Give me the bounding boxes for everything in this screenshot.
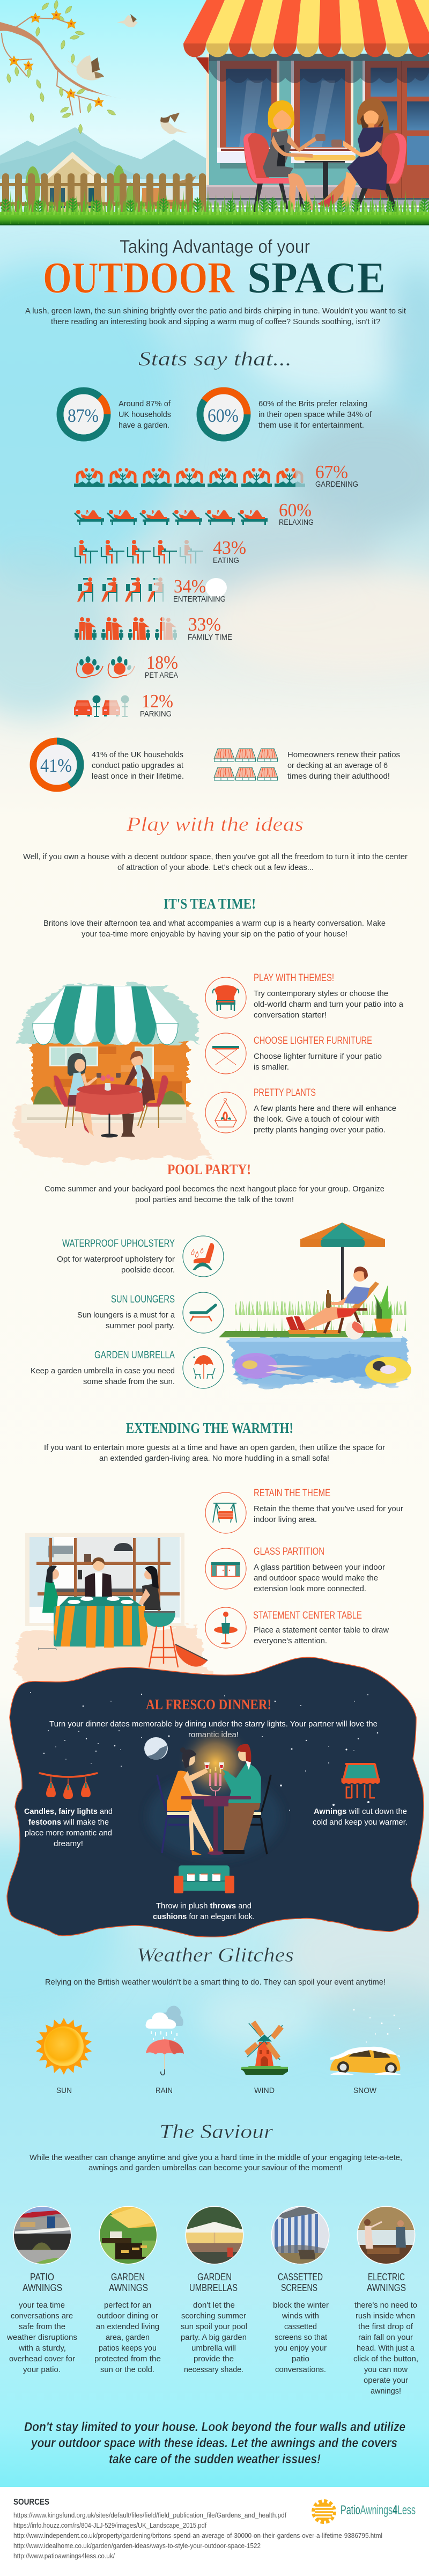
donut: 41 percent (33, 741, 80, 788)
heading: Weather Glitches: Weather Glitches (137, 1944, 294, 1966)
text: pool party intro: Come summer and your backyard pool becomes the next hangout place for your group. Organize (45, 1185, 384, 1194)
icon: rain cloud and umbrella (146, 2006, 184, 2075)
text: al fresco intro (49, 1720, 378, 1739)
text: patio awnings (6, 2272, 77, 2374)
icon: sun lounger (183, 1292, 224, 1333)
text: tea time intro: your tea-time more enjoyable by having your sip on the patio of your house! (82, 930, 347, 939)
pictogram row: gardening: GARDENING (315, 480, 358, 489)
brushed ground (13, 1626, 212, 1685)
icon: swing seat (205, 1492, 246, 1533)
text: garden umbrellas: don't let the (193, 2301, 235, 2310)
tip: waterproof upholstery (57, 1236, 224, 1277)
donut: 87 percent: 87% (68, 405, 99, 426)
text: candles and fairy lights: Candles, fairy lights and (24, 1807, 113, 1816)
text: garden umbrellas: party. A big garden (181, 2333, 247, 2342)
potted plant and ball (345, 1285, 393, 1340)
text: electric awnings: click of the button, (353, 2355, 418, 2363)
pictogram row: pet area: PET AREA (145, 671, 178, 680)
text: candles and fairy lights: festoons will make the (28, 1818, 109, 1827)
text: pretty plants: the look. Give a touch of colour with (254, 1115, 380, 1124)
table and candles (181, 1762, 251, 1855)
text: themes: PLAY WITH THEMES! (254, 972, 334, 984)
text: extending the warmth intro: an extended garden-living area. No more huddling in a small sofa! (99, 1454, 329, 1463)
text: garden umbrella (31, 1350, 175, 1386)
weather labels: SUN (56, 2087, 72, 2095)
heading: The Saviour: The Saviour (159, 2121, 273, 2143)
text: throws and cushions: Throw in plush throws and (156, 1902, 252, 1911)
text: garden umbrellas (181, 2272, 247, 2374)
text: garden awnings: sun or the cold. (100, 2366, 154, 2374)
text: decking: Homeowners renew their patios (287, 750, 400, 759)
stars (30, 1692, 378, 1811)
room backdrop (25, 1533, 184, 1626)
text: patio awnings: safe from the (19, 2323, 65, 2331)
text: garden umbrella: some shade from the sun. (83, 1378, 175, 1386)
moon (144, 1737, 168, 1760)
text: cassetted screens (273, 2272, 329, 2374)
text: garden umbrellas: GARDEN (197, 2272, 232, 2282)
man on sun lounger (286, 1267, 379, 1334)
text: patio awnings: weather disruptions (6, 2333, 77, 2342)
text: themes (254, 972, 404, 1020)
weather labels: WIND (254, 2087, 275, 2095)
text: patio awnings: conversations are (11, 2312, 73, 2321)
sources list: http://www.patioawnings4less.co.uk/ (13, 2552, 115, 2560)
pictogram row: family time: FAMILY TIME (188, 633, 232, 642)
umbrella (300, 1223, 385, 1302)
text: garden umbrellas: sun spoil your pool (181, 2323, 247, 2331)
text: garden umbrella: Keep a garden umbrella in case you need (31, 1367, 175, 1375)
heading: It's tea time: IT'S TEA TIME! (164, 896, 256, 912)
photo: yellow garden awning (99, 2206, 158, 2265)
text: statement center table: STATEMENT CENTER TABLE (253, 1610, 362, 1621)
icon: center table with flower (205, 1607, 246, 1648)
text: 41 percent (92, 750, 184, 781)
text: 60 percent: them use it for entertainment. (258, 421, 364, 430)
text: cassetted screens: winds with (282, 2312, 319, 2321)
pavement (206, 185, 429, 209)
panel background (7, 1657, 424, 1937)
text: cassetted screens: you enjoy your (275, 2344, 327, 2353)
text: throws and cushions (153, 1902, 255, 1921)
text: electric awnings: awnings! (371, 2387, 401, 2396)
text: waterproof: Opt for waterproof upholstery for (57, 1255, 175, 1264)
text: play with the ideas intro: Well, if you own a house with a decent outdoor space, then you've got all the freedom to turn it into the center (23, 853, 408, 861)
woman with blonde hair (243, 100, 316, 212)
striped dining table (39, 1597, 148, 1650)
heading: Pool party: POOL PARTY! (167, 1161, 251, 1177)
tip: sun loungers (77, 1292, 224, 1333)
text: pretty plants (254, 1087, 396, 1135)
sources heading: SOURCES (13, 2498, 49, 2507)
sources list (13, 2512, 382, 2560)
column: electric awnings (353, 2206, 418, 2396)
text: 87 percent (119, 399, 171, 430)
pictogram row: pet area (77, 652, 178, 680)
text: patio awnings: overhead cover for (9, 2355, 75, 2363)
text: cassetted screens: conversations. (275, 2366, 326, 2374)
text: saviour intro: awnings and garden umbrellas can become your saviour of the moment! (88, 2164, 343, 2172)
awning shadow (209, 54, 429, 83)
pictogram row: relaxing (75, 500, 314, 527)
barbecue grill (144, 1611, 208, 1667)
text: themes: conversation starter! (254, 1011, 327, 1020)
text: statement center table: everyone's attention. (254, 1637, 327, 1645)
text: sun loungers (77, 1294, 175, 1330)
text: electric awnings: the first drop of (358, 2323, 413, 2331)
text: extending the warmth intro: If you want to entertain more guests at a time and have an open garden, then utilize the space for (44, 1444, 385, 1452)
pictogram row: entertaining: 34% (174, 576, 206, 597)
text: waterproof (57, 1238, 175, 1275)
text: tea time intro: Britons love their afternoon tea and what accompanies a warm cup is a hearty conversation. Make (43, 919, 386, 928)
sources list: https://info.houzz.com/rs/804-JLJ-529/images/UK_Landscape_2015.pdf (13, 2522, 206, 2529)
text: electric awnings: there's no need to (354, 2301, 417, 2310)
shop wall (206, 54, 429, 185)
text: cassetted screens: cassetted (284, 2323, 317, 2331)
text: 60 percent: in their open space while 34% of (258, 410, 372, 419)
text: saviour intro: While the weather can change anytime and give you a hard time in the middle of your engaging tete-a-tete, (29, 2154, 402, 2162)
cafe wall (21, 1045, 186, 1123)
pictogram row: family time (75, 614, 232, 642)
man (222, 1744, 271, 1854)
photo: people under electric awning (357, 2206, 416, 2266)
text: cassetted screens: screens so that (275, 2333, 327, 2342)
text: 87 percent: UK households (119, 410, 171, 419)
pictogram row: gardening (74, 462, 358, 489)
donut: 60 percent: 60% (208, 405, 239, 426)
text: garden awnings: GARDEN (111, 2272, 145, 2282)
text: garden awnings: AWNINGS (109, 2282, 148, 2293)
intro text: A lush, green lawn, the sun shining brightly over the patio and birds chirping in tune. Wouldn't you want to sit (25, 307, 406, 316)
text: cassetted screens: CASSETTED (278, 2272, 323, 2282)
pictogram row: eating: EATING (213, 557, 239, 565)
text: lighter furniture: CHOOSE LIGHTER FURNITURE (254, 1035, 372, 1046)
icon: chair in circle (205, 977, 246, 1018)
text: electric awnings: AWNINGS (367, 2282, 406, 2293)
footer panel (0, 2487, 429, 2576)
text: glass partition: A glass partition between your indoor (254, 1563, 385, 1572)
cafe table (294, 134, 356, 200)
pictogram row: family time: 33% (188, 614, 221, 635)
pictogram row: pet area: 18% (146, 652, 178, 673)
weather labels: SNOW (353, 2087, 376, 2095)
closing statement (24, 2420, 405, 2467)
heading: Stats say that: Stats say that... (138, 348, 292, 370)
text: extending the warmth intro (44, 1444, 385, 1463)
heading: Taking Advantage of your: Taking Advantage of your (120, 237, 310, 257)
text: garden umbrellas: umbrella will (191, 2344, 236, 2353)
sources list: https://www.kingsfund.org.uk/sites/default/files/field/field_publication_file/Gardens_and_health.pdf (13, 2512, 286, 2519)
birds (66, 14, 188, 134)
icon: folding table in circle (205, 1033, 246, 1074)
title: Outdoor Space (43, 253, 386, 302)
icon: festoon lights (40, 1773, 97, 1799)
text: garden umbrellas: scorching summer (181, 2312, 246, 2321)
woman in black (138, 1566, 161, 1610)
title: Outdoor Space: SPACE (247, 253, 386, 302)
text: 41 percent: 41% of the UK households (92, 750, 183, 759)
text: pretty plants: pretty plants hanging over your patio. (254, 1126, 386, 1135)
icon: glass doors (205, 1548, 246, 1589)
text: 87 percent: Around 87% of (119, 399, 171, 408)
tip: retain the theme (205, 1488, 403, 1533)
icon: awning (342, 1764, 379, 1798)
intro text: there reading an interesting book and sipping a warm mug of coffee? Sounds soothing, isn't it? (51, 318, 380, 326)
icon: sofa with cushions (174, 1865, 234, 1893)
tip: pretty plants (205, 1087, 396, 1135)
text: retain the theme: RETAIN THE THEME (254, 1488, 330, 1499)
pictogram row: entertaining: ENTERTAINING (173, 595, 226, 604)
text: glass partition: GLASS PARTITION (254, 1546, 324, 1557)
pictogram row: relaxing: RELAXING (279, 518, 314, 527)
text: electric awnings: you can now (364, 2366, 408, 2374)
icon: windmill (241, 2021, 288, 2075)
text: garden awnings: area, garden (106, 2333, 150, 2342)
tip: glass partition (205, 1546, 385, 1593)
sources list: http://www.independent.co.uk/property/gardening/britons-spend-an-average-of-30000-on-their-gardens-over-a-lifetime-9386795.html (13, 2532, 382, 2540)
text: garden awnings: perfect for an (104, 2301, 151, 2310)
pictogram row: parking (74, 691, 173, 719)
text: 87 percent: have a garden. (119, 421, 169, 430)
tree branch with flowers (0, 0, 121, 134)
text: candles and fairy lights (24, 1807, 113, 1848)
photo: striped cassette screen (271, 2206, 330, 2265)
weather labels: RAIN (156, 2087, 173, 2095)
text: themes: old-world charm and turn your patio into a (254, 1000, 404, 1009)
logo: Patio Awnings 4 Less (314, 2501, 416, 2522)
text: electric awnings (353, 2272, 418, 2396)
woman, man and table (54, 1051, 168, 1138)
pictogram row: eating (75, 537, 246, 565)
text: electric awnings: rain fall on your (358, 2333, 413, 2342)
heading: Extending the warmth: EXTENDING THE WARMTH! (126, 1420, 293, 1436)
tip: statement center table (205, 1607, 389, 1648)
wooden frames (36, 1538, 180, 1613)
text: pool party intro: pool parties and become the talk of the town! (135, 1196, 294, 1204)
text: glass partition: and outdoor space would make the (254, 1574, 378, 1583)
woman (157, 1747, 214, 1855)
column: garden awnings (94, 2206, 161, 2374)
text: retain the theme: indoor living area. (254, 1516, 317, 1524)
icon: car in snow (330, 2009, 401, 2075)
striped awning (183, 0, 429, 74)
text: 41 percent: conduct patio upgrades at (92, 761, 184, 770)
text: sun loungers: Sun loungers is a must for a (77, 1311, 175, 1320)
title: Outdoor Space: OUTDOOR (43, 253, 235, 302)
text: cassetted screens: patio (292, 2355, 309, 2363)
donut: 41 percent: 41% (40, 755, 72, 776)
heading: Al fresco dinner: AL FRESCO DINNER! (146, 1696, 271, 1713)
text: electric awnings: ELECTRIC (368, 2272, 405, 2282)
text: al fresco intro: Turn your dinner dates memorable by dining under the starry lights. Your partner will love the (49, 1720, 378, 1729)
text: waterproof: poolside decor. (121, 1266, 175, 1275)
closing statement: take care of the sudden weather issues! (109, 2452, 321, 2467)
icon: decking planks (214, 749, 278, 780)
text: garden umbrellas: UMBRELLAS (189, 2282, 238, 2293)
pictogram row: entertaining (77, 576, 226, 604)
photo: large garden umbrella (185, 2206, 244, 2265)
pool water (230, 1338, 410, 1390)
text: saviour intro (29, 2154, 402, 2172)
text: play with the ideas intro: of attraction of your abode. Let's check out a few ideas... (117, 863, 314, 872)
text: 60 percent (258, 399, 372, 430)
text: awnings: Awnings will cut down the (314, 1807, 407, 1816)
hero illustration: patio scene (0, 0, 429, 225)
tip: choose lighter furniture (205, 1033, 382, 1074)
column: cassetted screens (271, 2206, 330, 2374)
donut: 87 percent (50, 381, 117, 448)
heading: Play with the ideas: Play with the ideas (126, 814, 304, 836)
pictogram row: relaxing: 60% (279, 500, 312, 521)
icon: chair with water drops (183, 1236, 224, 1277)
text: patio awnings: PATIO (30, 2272, 54, 2282)
text: garden umbrellas: necessary shade. (184, 2366, 243, 2374)
text: cassetted screens: block the winter (273, 2301, 329, 2310)
text: patio awnings: your patio. (23, 2366, 61, 2374)
text: tea time intro (43, 919, 386, 939)
tip: garden umbrella (31, 1348, 224, 1388)
text: awnings: cold and keep you warmer. (313, 1818, 408, 1827)
text: electric awnings: head. With just a (357, 2344, 415, 2353)
text: 60 percent: 60% of the Brits prefer relaxing (258, 399, 367, 408)
man standing (85, 1557, 112, 1598)
text: glass partition (254, 1546, 385, 1593)
text: statement center table (253, 1610, 389, 1645)
distant houses and trees (25, 152, 196, 214)
grass bank (219, 1301, 406, 1337)
text: play with the ideas intro (23, 853, 408, 872)
pictogram row: parking: 12% (142, 691, 173, 712)
illustration: man relaxing by the pool (219, 1223, 413, 1401)
text: pretty plants: A few plants here and there will enhance (254, 1104, 396, 1113)
icon: sun (35, 2018, 92, 2075)
text: themes: Try contemporary styles or choose the (254, 990, 388, 998)
teal and white awning (33, 986, 178, 1045)
text: sun loungers: SUN LOUNGERS (111, 1294, 175, 1305)
text: al fresco intro: romantic idea! (188, 1731, 239, 1739)
photo: patio awning storefront (13, 2206, 72, 2266)
text: decking: times during their adulthood! (287, 772, 390, 781)
text: garden umbrellas: provide the (194, 2355, 234, 2363)
text: candles and fairy lights: place more romantic and (25, 1829, 112, 1838)
sources list: http://www.idealhome.co.uk/garden/garden-ideas/ways-to-style-your-outdoor-space-1522 (13, 2542, 261, 2550)
text: pretty plants: PRETTY PLANTS (254, 1087, 316, 1099)
icon: hanging plant in circle (205, 1092, 246, 1133)
illustration: couple dining by candlelight (144, 1724, 282, 1860)
picket fence (0, 173, 206, 214)
pool rings and swimmers (228, 1353, 413, 1401)
text: waterproof: WATERPROOF UPHOLSTERY (62, 1238, 175, 1249)
text: garden awnings: protected from the (94, 2355, 161, 2363)
tip: play with themes (205, 972, 404, 1020)
panel: al fresco dinner (7, 1657, 424, 1937)
woman with brown hair (318, 98, 406, 212)
woman in green (42, 1565, 59, 1613)
text: electric awnings: rush inside when (356, 2312, 415, 2321)
text: garden awnings: patios keeps you (99, 2344, 157, 2353)
text: 41 percent: least once in their lifetime. (92, 772, 184, 781)
text: lighter furniture: is smaller. (254, 1063, 289, 1072)
column: garden umbrellas (181, 2206, 247, 2374)
text: weather intro: Relying on the British weather wouldn't be a smart thing to do. They can spoil your event anytime! (45, 1978, 386, 1987)
text: decking: or decking at an average of 6 (287, 761, 388, 770)
text: lighter furniture: Choose lighter furniture if your patio (254, 1052, 382, 1061)
text: electric awnings: operate your (364, 2376, 408, 2385)
pictogram row: parking: PARKING (140, 710, 172, 719)
text: statement center table: Place a statement center table to draw (254, 1626, 389, 1635)
text: patio awnings: with a sturdy, (18, 2344, 66, 2353)
text: lighter furniture (254, 1035, 382, 1072)
pictogram row: gardening: 67% (315, 462, 348, 482)
text: garden umbrella: GARDEN UMBRELLA (94, 1350, 175, 1361)
illustration: friends at a garden living area (13, 1533, 212, 1685)
text: decking (287, 750, 400, 781)
pictogram row: eating: 43% (213, 537, 246, 558)
text: garden awnings (94, 2272, 161, 2374)
text: cassetted screens: SCREENS (281, 2282, 317, 2293)
text: patio awnings: AWNINGS (23, 2282, 62, 2293)
column: patio awnings (6, 2206, 77, 2374)
text: pool party intro (45, 1185, 384, 1204)
lawn with grass and ferns (0, 188, 429, 225)
icon: umbrella and chairs (183, 1348, 224, 1388)
text: garden awnings: outdoor dining or (97, 2312, 158, 2321)
text: retain the theme (254, 1488, 403, 1524)
text: retain the theme: Retain the theme that you've used for your (254, 1505, 403, 1513)
brushed ground (13, 985, 212, 1165)
donut: 60 percent (191, 382, 256, 447)
weather labels (56, 2087, 376, 2095)
mountains (0, 127, 206, 189)
text: awnings (313, 1807, 408, 1827)
shop windows and door (217, 61, 429, 199)
pendant lamp (114, 1543, 133, 1551)
text: sun loungers: summer pool party. (106, 1322, 175, 1330)
illustration: couple at tea under striped awning (13, 985, 212, 1165)
text: candles and fairy lights: dreamy! (54, 1840, 83, 1848)
intro text (25, 307, 406, 326)
text: glass partition: extension look more connected. (254, 1585, 366, 1593)
text: garden awnings: an extended living (96, 2323, 159, 2331)
text: patio awnings: your tea time (19, 2301, 65, 2310)
text: throws and cushions: cushions for an elegant look. (153, 1913, 255, 1921)
logo: Patio Awnings 4 Less: PatioAwnings4Less (341, 2503, 416, 2518)
